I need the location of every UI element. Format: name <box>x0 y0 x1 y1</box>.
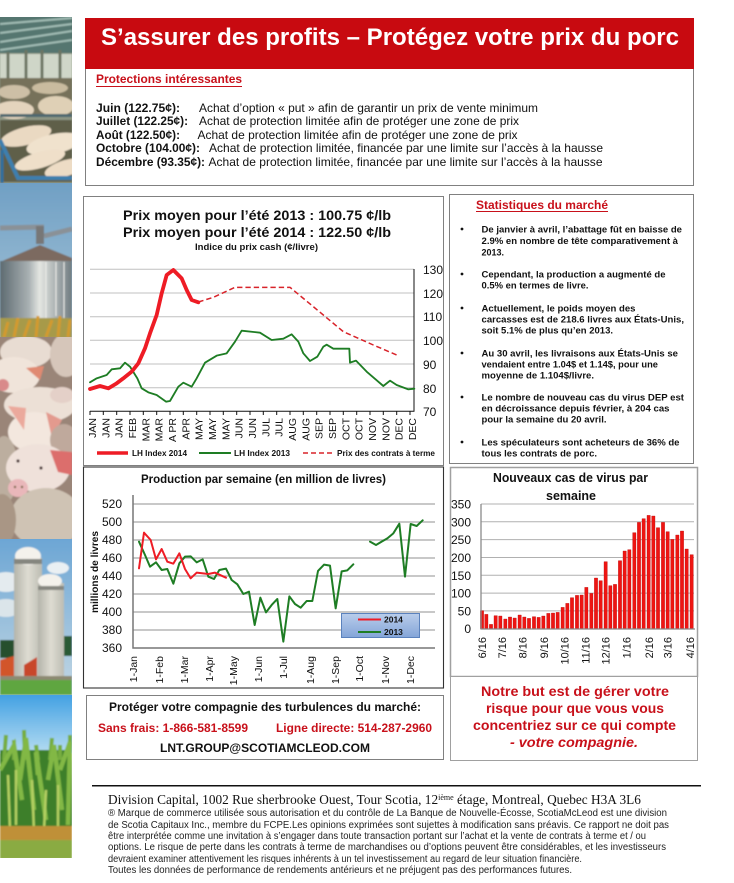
x axis labels: DEC <box>407 418 419 440</box>
bar chart: new cases <box>480 504 695 629</box>
x axis labels: JAN <box>100 418 112 438</box>
x axis labels: 4/16 <box>685 637 697 658</box>
stat: production <box>461 270 666 292</box>
title: S’assurer des profits – Protégez votre prix du porc <box>101 24 679 51</box>
x axis labels: 3/16 <box>662 637 674 658</box>
x axis labels: MAR <box>140 418 152 441</box>
x axis labels: 1/16 <box>622 637 634 658</box>
x axis labels: OCT <box>354 417 366 440</box>
stat: DEP virus <box>461 393 685 426</box>
x axis labels: 2/16 <box>644 637 656 658</box>
address: Division Capital, 1002 Rue sherbrooke Ouest, Tour Scotia, 12 <box>108 792 438 807</box>
stat: carcass weight: carcasses est de 218.6 livres aux États-Unis, <box>482 314 684 326</box>
x axis labels: A PR <box>167 418 179 442</box>
x axis labels <box>87 417 419 442</box>
y axis labels <box>451 498 471 636</box>
list of protections: Achat de protection limitée, financée par une limite sur l’accès à la hausse <box>208 155 603 169</box>
x axis labels: 1-Oct <box>354 656 366 682</box>
stat: slaughter: 2013. <box>482 248 504 258</box>
y axis labels: 0 <box>464 622 471 636</box>
y axis labels: 380 <box>102 623 122 637</box>
series: LH Index 2014 <box>90 270 198 389</box>
series: 2013 second part <box>370 520 423 577</box>
phone numbers: Sans frais: 1-866-581-8599 <box>98 721 248 735</box>
y axis labels: 460 <box>102 551 122 565</box>
series: 2014 <box>139 533 226 578</box>
y axis labels: 350 <box>451 498 471 512</box>
x axis labels: 7/16 <box>497 637 509 658</box>
x axis labels: 10/16 <box>560 637 572 665</box>
stat: DEP virus: en décroissance depuis février, à 204 cas <box>482 404 670 415</box>
y axis labels: 360 <box>102 641 122 655</box>
stat: slaughter: 2.9% en nombre de tête comparativement à <box>482 236 679 247</box>
chart title <box>123 207 391 253</box>
photo: corn field <box>0 693 74 859</box>
series: 2013 first part <box>139 542 353 642</box>
y axis labels: 120 <box>423 287 443 301</box>
stat: carcass weight: soit 5.1% de plus qu’en 2013. <box>482 326 613 337</box>
address: étage, Montreal, Quebec H3A 3L6 <box>454 792 641 807</box>
phone numbers: Ligne directe: 514-287-2960 <box>276 721 432 735</box>
x axis labels: 6/16 <box>477 637 489 658</box>
y axis labels: 100 <box>423 334 443 348</box>
photo: farm silos <box>0 537 74 697</box>
chart title: Prix moyen pour l’été 2013 : 100.75 ¢/lb <box>123 207 391 223</box>
stat: speculators <box>461 438 680 460</box>
x axis labels: NOV <box>380 418 392 441</box>
panel: goal statement: - votre compagnie. <box>510 734 638 750</box>
chart title: Production par semaine (en million de livres) <box>141 472 386 486</box>
legend: Prix des contrats à terme <box>337 448 435 458</box>
panel: protections <box>85 18 694 186</box>
x axis labels: JUN <box>247 418 259 438</box>
x axis labels: 1-Mar <box>179 655 191 683</box>
disclaimer: de Scotia Capitaux Inc., membre du FCPE.Les opinions exprimées sont sujettes à modification sans préavis. Ce rapport ne doit pas <box>108 820 669 831</box>
y axis labels: 480 <box>102 533 122 547</box>
stat: slaughter <box>461 224 682 258</box>
stat: production: Cependant, la production a augmenté de <box>482 270 666 280</box>
series: futures price <box>198 287 398 356</box>
x axis labels: 9/16 <box>539 637 551 658</box>
stat: deliveries: vendaient entre 1.04$ et 1.14$, pour une <box>482 360 658 371</box>
stat: DEP virus: Le nombre de nouveau cas du virus DEP est <box>482 393 685 404</box>
list of protections: Achat de protection limitée afin de protéger une zone de prix <box>199 114 519 128</box>
y axis title: millions de livres <box>89 531 101 613</box>
x axis labels: 1-Apr <box>204 656 216 682</box>
x axis labels: JUL <box>260 418 272 437</box>
x axis labels: 1-Jan <box>128 656 140 682</box>
y axis labels: 400 <box>102 605 122 619</box>
stat: deliveries: Au 30 avril, les livraisons aux États-Unis se <box>482 348 678 360</box>
x axis labels: 1-Jun <box>253 656 265 682</box>
y axis labels: 80 <box>423 382 437 396</box>
list of protections: Achat d’option « put » afin de garantir un prix de vente minimum <box>199 101 538 115</box>
panel: virus cases chart <box>450 468 698 676</box>
y axis labels: 90 <box>423 358 437 372</box>
chart title: Nouveaux cas de virus par <box>493 471 648 485</box>
panel: contact <box>86 696 444 760</box>
disclaimer: devraient examiner attentivement les risques inhérents à un tel investissement au regard de leur situation financière. <box>108 854 582 865</box>
x axis labels: AUG <box>287 418 299 441</box>
title banner <box>85 18 694 69</box>
email: LNT.GROUP@SCOTIAMCLEOD.COM <box>160 741 370 755</box>
list of protections: Octobre (104.00¢): <box>96 141 200 155</box>
series: LH Index 2013 <box>90 331 414 402</box>
x axis labels: JAN <box>114 418 126 438</box>
y axis labels: 500 <box>102 515 122 529</box>
chart title: Indice du prix cash (¢/livre) <box>195 242 318 253</box>
stat: slaughter: De janvier à avril, l’abattage fût en baisse de <box>482 224 682 236</box>
x axis labels: FEB <box>127 418 139 438</box>
y axis labels: 150 <box>451 569 471 583</box>
x axis labels: SEP <box>327 418 339 439</box>
x axis labels: APR <box>180 418 192 440</box>
list of protections: Achat de protection limitée afin de protéger une zone de prix <box>198 128 518 142</box>
y axis labels <box>102 497 122 655</box>
photo: grain silo <box>0 181 74 339</box>
y axis labels: 50 <box>458 604 471 618</box>
y axis labels: 250 <box>451 533 471 547</box>
x axis labels: DEC <box>394 418 406 440</box>
stat: speculators: Les spéculateurs sont acheteurs de 36% de <box>482 438 680 449</box>
x axis labels: 11/16 <box>580 637 592 664</box>
stat: production: 0.5% en termes de livre. <box>482 281 588 292</box>
x axis labels: SEP <box>314 418 326 439</box>
y axis labels: 420 <box>102 587 122 601</box>
heading: statistics: Statistiques du marché <box>476 198 608 212</box>
list of protections: Décembre (93.35¢): <box>96 155 205 169</box>
legend: LH Index 2014 <box>132 448 187 458</box>
x axis labels: JUL <box>274 418 286 437</box>
stat: deliveries: moyenne de 1.104$/livre. <box>482 371 594 382</box>
x axis labels: JUN <box>234 418 246 438</box>
x axis labels: 1-Jul <box>278 656 290 679</box>
chart title: semaine <box>546 489 596 503</box>
line chart: cash index <box>87 263 443 442</box>
stat: DEP virus: pour la semaine du 20 avril. <box>482 415 606 426</box>
y axis labels: 70 <box>423 405 437 419</box>
x axis labels: OCT <box>340 417 352 440</box>
footer: legal <box>92 785 701 876</box>
legend <box>342 614 420 638</box>
y axis labels: 200 <box>451 551 471 565</box>
legend: 2014 <box>384 614 403 624</box>
x axis labels: JAN <box>87 418 99 438</box>
disclaimer <box>108 806 669 876</box>
list of protections <box>96 101 603 169</box>
photo: pigs close-up <box>0 337 72 539</box>
panel: weekly production chart <box>84 467 444 688</box>
legend <box>97 448 435 458</box>
disclaimer: Toutes les données de performance de rendements antérieurs et ne préjugent pas des performances futures. <box>108 865 572 876</box>
list of protections: Août (122.50¢): <box>96 128 180 142</box>
list of protections: Juillet (122.25¢): <box>96 114 188 128</box>
x axis labels: MAY <box>194 418 206 440</box>
stat: carcass weight: Actuellement, le poids moyen des <box>482 304 636 315</box>
x axis labels: 1-May <box>228 655 240 685</box>
x axis labels: MAY <box>207 418 219 440</box>
x axis labels: MAR <box>154 418 166 441</box>
chart title <box>493 471 648 503</box>
y axis labels: 520 <box>102 497 122 511</box>
disclaimer: options. Le risque de perte dans les contrats à terme de marchandises ou d’options peuvent être considérables, et les investisseurs <box>108 842 666 853</box>
x axis labels: AUG <box>300 418 312 441</box>
legend: LH Index 2013 <box>234 448 290 458</box>
stat: speculators: tous les contrats de porc. <box>482 449 597 460</box>
x axis labels: 1-Nov <box>380 655 392 684</box>
stat: deliveries <box>461 348 678 382</box>
y axis labels <box>423 263 443 419</box>
address: ième <box>438 793 454 802</box>
y axis labels: 100 <box>451 587 471 601</box>
chart title: Prix moyen pour l’été 2014 : 122.50 ¢/lb <box>123 224 391 240</box>
y axis labels: 440 <box>102 569 122 583</box>
legend: 2013 <box>384 627 403 637</box>
y axis labels: 110 <box>423 310 442 324</box>
y axis labels: 300 <box>451 515 471 529</box>
panel: goal statement: concentriez sur ce qui compte <box>473 717 676 733</box>
stat: carcass weight <box>461 304 684 337</box>
heading: protections: Protections intéressantes <box>96 72 242 86</box>
x axis labels: 1-Sep <box>330 656 342 684</box>
x axis labels: NOV <box>367 418 379 441</box>
line chart: production <box>133 495 435 648</box>
photo: pig barn <box>0 17 72 183</box>
disclaimer: être interprétée comme une invitation à s’engager dans toute transaction portant sur l’achat et la vente de contrats à terme et / ou <box>108 831 646 842</box>
panel: goal statement <box>450 676 698 760</box>
list of protections: Juin (122.75¢): <box>96 101 180 115</box>
panel: price chart <box>84 196 444 466</box>
x axis labels <box>477 637 697 665</box>
x axis labels: 1-Feb <box>154 656 166 683</box>
y axis labels: 130 <box>423 263 443 277</box>
x axis labels: 1-Dec <box>405 656 417 684</box>
phone numbers <box>98 721 432 735</box>
disclaimer: ® Marque de commerce utilisée sous autorisation et du contrôle de La Banque de Nouvelle-Écosse, ScotiaMcLeod est une division <box>108 806 667 819</box>
panel: market statistics <box>450 194 694 464</box>
contact heading: Protéger votre compagnie des turbulences du marché: <box>109 700 421 714</box>
x axis labels: 1-Aug <box>305 656 317 684</box>
panel: goal statement: risque pour que vous vous <box>486 700 664 716</box>
list of protections: Achat de protection limitée, financée par une limite sur l’accès à la hausse <box>209 141 603 155</box>
x axis labels: 12/16 <box>600 637 612 665</box>
x axis labels: 8/16 <box>518 637 530 658</box>
x axis labels: MAY <box>220 418 232 440</box>
x axis labels <box>128 655 417 685</box>
panel: goal statement: Notre but est de gérer votre <box>481 683 669 699</box>
